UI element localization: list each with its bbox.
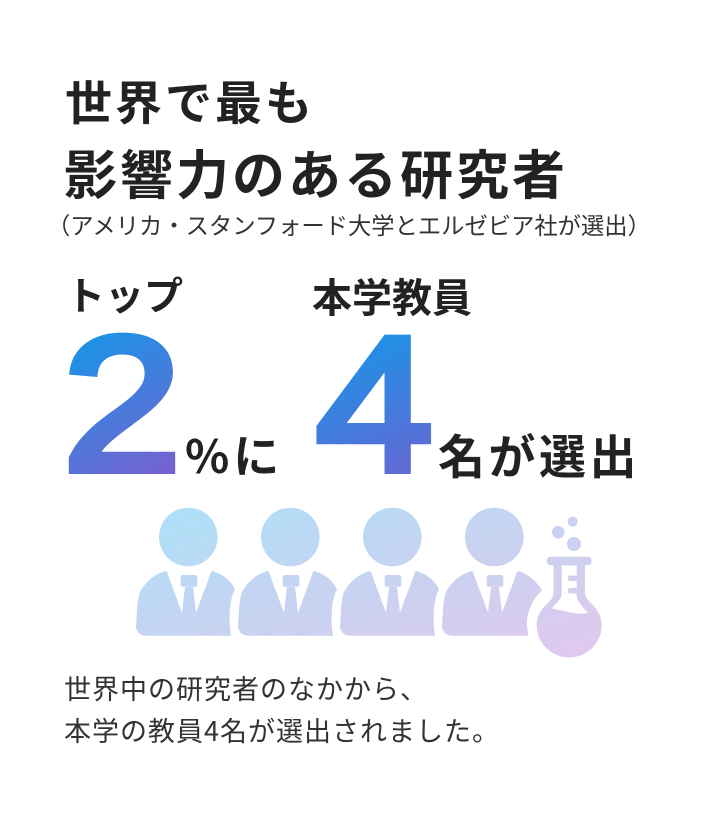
- icon: flask: [537, 517, 602, 658]
- unit: percent: %に: [185, 421, 283, 487]
- icon: researcher 4: [442, 508, 542, 636]
- icon: researcher 3: [340, 508, 439, 636]
- body text: [64, 668, 500, 749]
- body line 1: 世界中の研究者のなかから、: [64, 668, 428, 707]
- body line 2: 本学の教員4名が選出されました。: [64, 710, 500, 749]
- title line 1: 世界で最も: [65, 65, 315, 134]
- title line 2: 影響力のある研究者: [64, 134, 568, 210]
- number 4: 4: [316, 297, 433, 511]
- label: faculty: 本学教員: [312, 266, 472, 324]
- number 2: 2: [62, 297, 181, 511]
- label: top: トップ: [66, 266, 183, 322]
- icon: researcher 1: [136, 508, 235, 636]
- icon: researcher 2: [238, 508, 337, 636]
- unit: selected: 名が選出: [438, 419, 640, 488]
- title: [64, 65, 568, 210]
- subtitle: （アメリカ・スタンフォード大学とエルゼビア社が選出）: [47, 207, 651, 241]
